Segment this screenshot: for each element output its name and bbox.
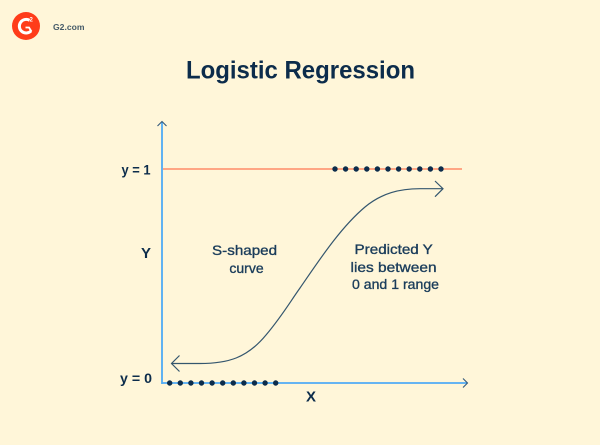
icon: G2 logo — [12, 12, 40, 40]
chart: logistic regression — [120, 122, 468, 406]
S-shaped curve with arrowheads — [172, 181, 443, 372]
annotation: S-shaped curve: curve — [229, 260, 264, 276]
annotation: predicted Y range: Predicted Y — [355, 241, 434, 257]
title: Logistic Regression — [186, 56, 415, 84]
label: Y axis: Y — [141, 245, 151, 262]
data points at y = 1 — [332, 166, 444, 172]
y = 1 reference line — [163, 168, 462, 170]
annotation: predicted Y range: lies between — [351, 259, 437, 275]
y axis — [158, 122, 166, 384]
label: X axis: X — [306, 388, 316, 406]
data points at y = 0 — [167, 380, 278, 386]
annotation: S-shaped curve: S-shaped — [212, 242, 277, 258]
brand label: G2.com — [53, 22, 85, 32]
icon: G2 logo: 2 — [30, 18, 34, 24]
label: y = 1: y = 1 — [122, 162, 151, 178]
label: y = 0: y = 0 — [120, 370, 152, 386]
annotation: predicted Y range: 0 and 1 range — [352, 276, 439, 292]
x axis — [162, 378, 468, 388]
